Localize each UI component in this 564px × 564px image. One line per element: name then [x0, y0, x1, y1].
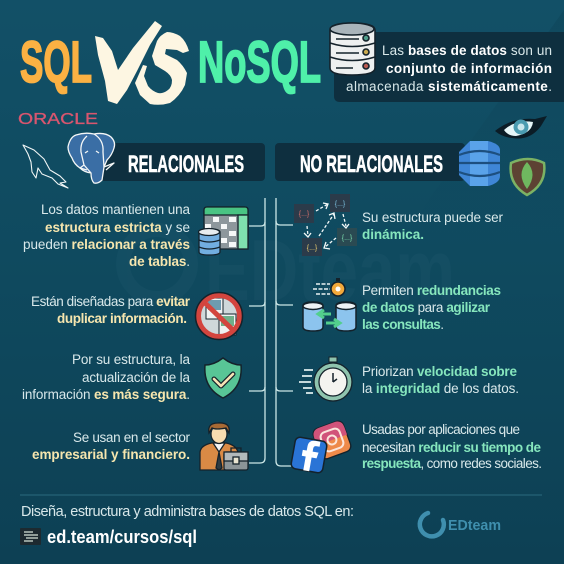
footer link: ed.team/cursos/sql: [47, 527, 197, 547]
text: evitar duplicar: Están diseñadas para evitar: [31, 294, 191, 309]
text: redundancias: de datos para agilizar: [362, 300, 491, 315]
text: más segura: actualización de la: [82, 370, 190, 385]
icon: redundant databases: [303, 278, 356, 331]
text: redundancias: Permiten redundancias: [362, 283, 501, 298]
logo: Oracle: ORACLE: [18, 111, 98, 128]
text: redundancias: las consultas.: [362, 317, 444, 332]
icon: DynamoDB: [459, 141, 500, 186]
text: estructura estricta: [23, 202, 190, 269]
icon: dynamic structure boxes: [294, 194, 357, 256]
connector: left bracket: [249, 198, 265, 463]
text: redes sociales: [362, 422, 542, 471]
text: más segura: [22, 352, 190, 402]
icon: Cassandra eye: [495, 116, 547, 138]
connector: right bracket: [276, 198, 293, 466]
text: dinámica: Su estructura puede ser: [362, 210, 504, 225]
text: dinámica: dinámica.: [362, 227, 424, 242]
text: velocidad: Priorizan velocidad sobre: [362, 364, 517, 379]
watermark: [123, 223, 455, 319]
text: estructura estricta: estructura estricta y se: [45, 220, 190, 235]
icon: course list: [20, 528, 41, 545]
panel: relacionales heading bar: RELACIONALES: [128, 151, 244, 178]
footer text: Diseña, estructura y administra bases de datos SQL en:: [21, 504, 354, 520]
icon: dynamic structure boxes: {...}: [307, 245, 318, 252]
icon: dynamic structure boxes: {...}: [335, 201, 346, 208]
text: estructura estricta: Los datos mantienen una: [41, 202, 190, 217]
title: SQL: SQL: [20, 30, 92, 95]
icon: businessman with briefcase: [200, 423, 248, 470]
icon: database server: [330, 23, 375, 75]
title: NoSQL: NoSQL: [198, 30, 321, 95]
icon: dynamic structure boxes: {...}: [299, 211, 310, 218]
text: evitar duplicar: [31, 294, 191, 326]
icon: PostgreSQL elephant: [68, 133, 115, 183]
text: redes sociales: necesitan reducir su tiempo de: [362, 440, 541, 455]
icon: Instagram and Facebook: [290, 419, 353, 474]
panel: relacionales heading bar: [100, 143, 265, 181]
text: más segura: Por su estructura, la: [72, 352, 190, 367]
definition text: conjunto de información: [386, 61, 552, 76]
text: sector empresarial: empresarial y financiero.: [32, 447, 190, 462]
definition text: Las bases de datos son un: [382, 43, 552, 58]
text: dinámica: [362, 210, 504, 242]
text: estructura estricta: de tablas.: [129, 254, 190, 269]
text: velocidad: [362, 364, 519, 396]
icon: MongoDB shield: [511, 159, 544, 195]
panel: definition: [334, 32, 564, 102]
logo: EDteam: [420, 513, 501, 536]
text: velocidad: la integridad de los datos.: [362, 381, 519, 396]
watermark: EDteam: [205, 223, 455, 319]
text: más segura: información es más segura.: [22, 387, 190, 402]
icon: MySQL dolphin: [23, 145, 68, 188]
icon: no duplicates: [196, 292, 242, 340]
text: sector empresarial: Se usan en el sector: [73, 430, 190, 445]
text: sector empresarial: [32, 430, 190, 462]
icon: shield with check: [205, 358, 241, 398]
text: redundancias: [362, 283, 501, 332]
text: redes sociales: Usadas por aplicaciones que: [362, 422, 520, 437]
logo: EDteam: EDteam: [448, 517, 501, 534]
icon: table with database: [198, 207, 248, 255]
text: evitar duplicar: duplicar información.: [57, 311, 187, 326]
text: redes sociales: respuesta, como redes sociales.: [362, 456, 542, 471]
text: estructura estricta: pueden relacionar a través: [23, 237, 190, 252]
icon: stopwatch: [299, 357, 352, 401]
definition text: almacenada sistemáticamente.: [346, 79, 552, 94]
definition text: [346, 43, 552, 94]
title: VS brush lettering: [95, 21, 189, 105]
panel: no relacionales heading bar: NO RELACIONALES: [300, 151, 443, 178]
panel: no relacionales heading bar: [275, 143, 465, 181]
icon: dynamic structure boxes: {...}: [342, 235, 353, 242]
